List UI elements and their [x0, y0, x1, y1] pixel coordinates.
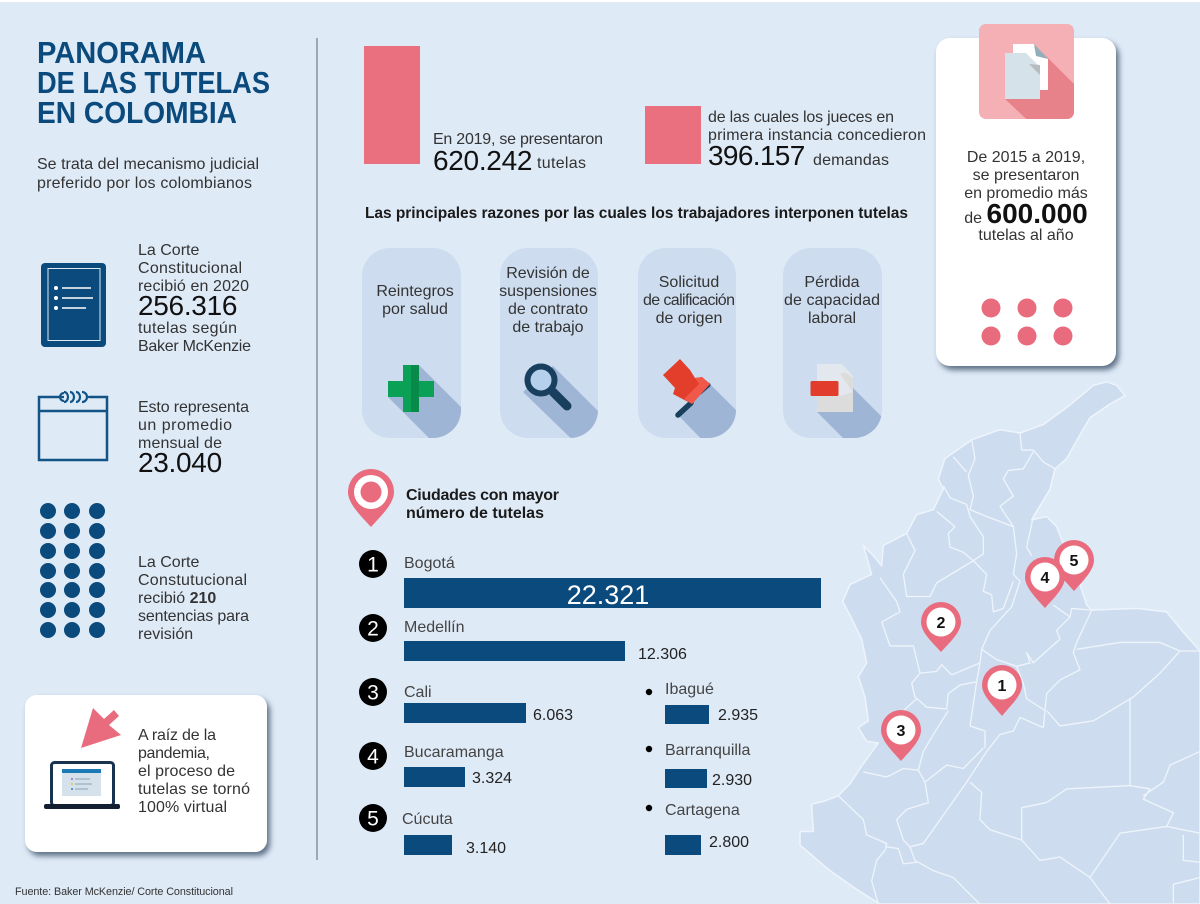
bar: Ibagué: [646, 681, 758, 724]
stat: monthly average: 23.040: [138, 447, 222, 478]
stat: granted: primera instancia concedieron: [708, 127, 926, 144]
icon: documents: [979, 24, 1074, 119]
bar: Cúcuta: 3.140: [466, 840, 506, 857]
card: solicitud: [638, 248, 736, 438]
card: revision: de contrato: [508, 301, 588, 318]
subtitle: Se trata del mecanismo judicial: [37, 156, 259, 173]
text: virtual process: pandemia,: [138, 745, 210, 762]
text: virtual process: tutelas se tornó: [138, 781, 250, 798]
stat: sentences: La Corte: [138, 554, 199, 571]
stat: granted: 396.157: [708, 140, 805, 171]
text: virtual process: [138, 727, 250, 816]
map pin 5: 5: [1070, 553, 1079, 570]
bar: Medellín: [359, 614, 687, 663]
card: revision: de trabajo: [512, 319, 584, 336]
card: perdida: laboral: [808, 310, 856, 327]
stat: sentences: recibió 210: [138, 590, 216, 607]
bar: Bucaramanga: [359, 742, 512, 787]
icon: dots grid: [40, 503, 105, 638]
stat: 2019 tutelas: En 2019, se presentaron: [433, 131, 603, 148]
panel: 2015-2019 average: [936, 24, 1116, 366]
text: average: De 2015 a 2019,: [967, 149, 1085, 166]
bar: Cali: Cali: [404, 684, 432, 701]
bar: Medellín: Medellín: [404, 619, 464, 636]
map pin 4: [1025, 557, 1065, 608]
card: perdida: Pérdida: [804, 274, 860, 291]
card: revision: [500, 248, 598, 438]
bar: Ibagué: 2.935: [718, 707, 758, 724]
stat: tutelas received: La Corte: [138, 242, 199, 259]
heading: main reasons: Las principales razones por las cuales los trabajadores interponen tutelas: [365, 205, 908, 222]
bar: Bogotá: [359, 550, 821, 610]
bar: Cúcuta: [359, 804, 506, 857]
bar: Ibagué: Ibagué: [665, 681, 714, 698]
text: average: se presentaron: [973, 167, 1079, 184]
map pin 2: [921, 602, 961, 652]
heading: cities: [406, 487, 559, 522]
map pin 2: 2: [937, 615, 946, 632]
source: Fuente: Baker McKenzie/ Corte Constitucional: [15, 886, 233, 898]
bar: Barranquilla: 2.930: [712, 772, 752, 789]
stat: monthly average: Esto representa: [138, 399, 249, 416]
stat: monthly average: [138, 399, 249, 478]
bar: Bucaramanga: Bucaramanga: [404, 744, 504, 761]
map pin 3: [881, 710, 921, 761]
stat: sentences: Constutucional: [138, 572, 247, 589]
bar: Bucaramanga: 4: [367, 746, 379, 768]
title: [37, 36, 270, 130]
icon: green cross: [388, 365, 434, 412]
text: average: de 600.000: [964, 198, 1088, 229]
icon: arrow: [81, 708, 121, 748]
icon: calendar: [39, 392, 107, 460]
stat: sentences: revisión: [138, 626, 193, 643]
bar: Cartagena: 2.800: [709, 834, 749, 851]
map of Colombia: [800, 382, 1200, 904]
card: solicitud: de origen: [656, 310, 722, 327]
icon: laptop: [44, 762, 120, 809]
text: virtual process: el proceso de: [138, 763, 235, 780]
stat: granted: [645, 106, 926, 171]
text: virtual process: A raíz de la: [138, 727, 216, 744]
card: solicitud: Solicitud: [659, 274, 719, 291]
card: reintegros: por salud: [382, 301, 448, 318]
text: average: [964, 149, 1088, 244]
card: revision: suspensiones: [499, 283, 597, 300]
text: average: en promedio más: [964, 185, 1088, 202]
card: reintegros: Reintegros: [376, 283, 454, 300]
icon: magnifier: [528, 366, 567, 406]
subtitle: [37, 156, 259, 192]
bar: Barranquilla: [646, 742, 752, 789]
card: perdida: [783, 248, 882, 438]
map pin 4: 4: [1041, 570, 1050, 587]
bar: Medellín: 12.306: [638, 646, 687, 663]
stat: tutelas received: Constitucional: [138, 260, 242, 277]
panel: virtual process: [25, 695, 267, 852]
stat: granted: demandas: [813, 152, 889, 169]
stat: tutelas received: recibió en 2020: [138, 278, 249, 295]
stat: monthly average: un promedio: [138, 417, 232, 434]
icon: push pin: [663, 359, 710, 415]
icon: pink dots: [982, 298, 1072, 346]
bar: Bogotá: 1: [367, 554, 379, 576]
map pin 5: [1054, 540, 1094, 591]
bar: Cartagena: [646, 802, 749, 855]
stat: 2019 tutelas: 620.242: [433, 145, 532, 176]
bar: Cali: [359, 678, 573, 724]
stat: sentences: sentencias para: [138, 608, 249, 625]
title: PANORAMA: [37, 36, 206, 70]
bar: Cúcuta: Cúcuta: [402, 811, 453, 828]
bar: Bogotá: 22.321: [567, 580, 649, 610]
stat: sentences: [138, 554, 249, 643]
heading: cities: Ciudades con mayor: [406, 487, 559, 504]
card: revision: Revisión de: [506, 265, 590, 282]
title: DE LAS TUTELAS: [37, 66, 270, 100]
stat: tutelas received: 256.316: [138, 290, 237, 321]
map pin 1: 1: [998, 678, 1007, 695]
bar: Bucaramanga: 3.324: [472, 770, 512, 787]
bar: Cali: 3: [367, 682, 379, 704]
text: average: tutelas al año: [978, 227, 1074, 244]
bar: Cúcuta: 5: [367, 808, 379, 830]
card: solicitud: de calificación: [643, 292, 735, 309]
map pin 3: 3: [897, 723, 906, 740]
title: EN COLOMBIA: [37, 96, 237, 130]
subtitle: preferido por los colombianos: [37, 175, 252, 192]
bar: Barranquilla: Barranquilla: [665, 742, 750, 759]
icon: document with red tag: [810, 364, 853, 412]
stat: monthly average: mensual de: [138, 435, 222, 452]
stat: granted: de las cuales los jueces en: [708, 109, 894, 126]
stat: tutelas received: [138, 242, 251, 355]
bar: Medellín: 2: [367, 618, 379, 640]
icon: location pin: [348, 469, 394, 527]
text: virtual process: 100% virtual: [138, 799, 227, 816]
card: reintegros: [362, 248, 461, 438]
bar: Bogotá: Bogotá: [404, 555, 455, 572]
card: perdida: de capacidad: [784, 292, 880, 309]
stat: tutelas received: tutelas según: [138, 320, 237, 337]
bar: Cartagena: Cartagena: [665, 802, 740, 819]
heading: cities: número de tutelas: [406, 505, 544, 522]
stat: tutelas received: Baker McKenzie: [138, 338, 251, 355]
stat: 2019 tutelas: [364, 46, 603, 176]
map pin 1: [982, 665, 1022, 716]
bar chart: cities: [359, 550, 821, 857]
bar: Cali: 6.063: [533, 707, 573, 724]
stat: 2019 tutelas: tutelas: [537, 155, 586, 172]
icon: document: [41, 263, 106, 347]
